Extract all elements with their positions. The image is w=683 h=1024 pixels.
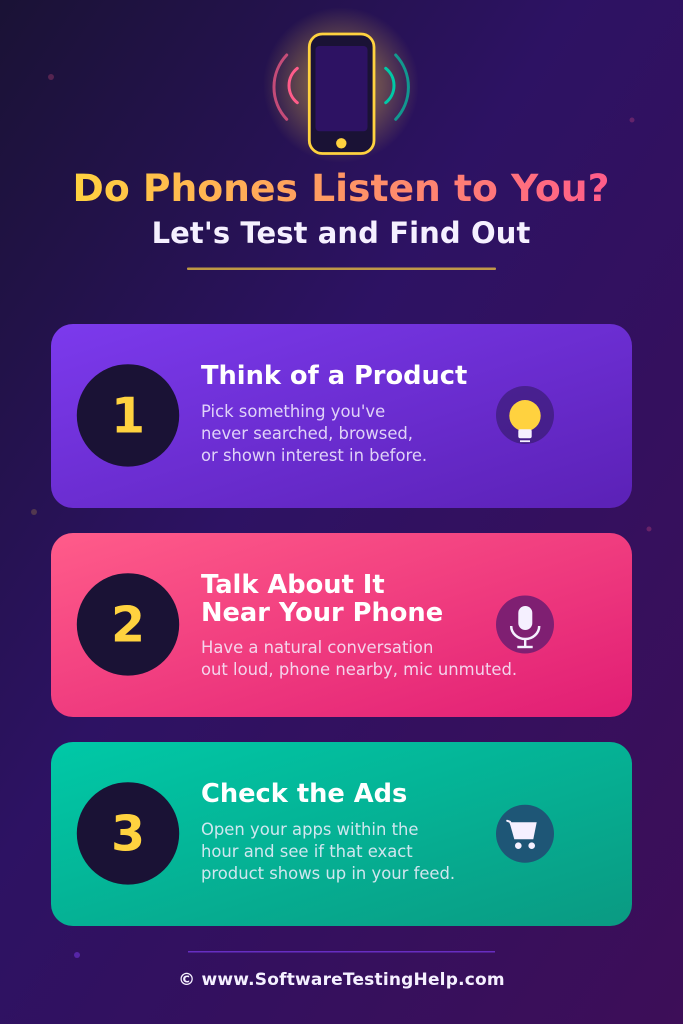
number badge 3 xyxy=(77,782,179,885)
background dots xyxy=(31,74,652,958)
body 2: out loud, phone nearby, mic unmuted. xyxy=(201,660,517,679)
icon: microphone xyxy=(496,596,554,654)
title: Do Phones Listen to You? xyxy=(73,166,609,210)
footer text: © www.SoftwareTestingHelp.com xyxy=(178,970,505,990)
title divider xyxy=(187,268,496,270)
heading 2: Near Your Phone xyxy=(201,598,443,628)
body 3: Open your apps within the xyxy=(201,820,418,839)
phone button xyxy=(336,138,346,148)
footer divider xyxy=(188,951,495,952)
phone body xyxy=(309,34,374,154)
body 2: Have a natural conversation xyxy=(201,638,433,657)
panel: step 3 xyxy=(51,742,632,926)
right inner wave xyxy=(386,68,394,103)
panel: step 2: 2 xyxy=(111,596,145,654)
icon: shopping cart xyxy=(496,805,554,863)
heading 3: Check the Ads xyxy=(201,779,407,809)
left outer wave xyxy=(274,55,287,119)
phone screen xyxy=(316,46,368,131)
panel: step 1 xyxy=(51,324,632,508)
number badge 1 xyxy=(77,364,179,467)
right outer wave xyxy=(396,55,408,119)
icon: light bulb xyxy=(496,386,554,444)
heading 2: Talk About It xyxy=(201,570,385,600)
body 1: never searched, browsed, xyxy=(201,424,413,443)
subtitle: Let's Test and Find Out xyxy=(152,216,530,250)
body 1: or shown interest in before. xyxy=(201,446,427,465)
body 3: hour and see if that exact xyxy=(201,842,413,861)
icon: phone with sound waves xyxy=(263,7,419,163)
left inner wave xyxy=(289,68,297,103)
heading 1: Think of a Product xyxy=(201,361,467,391)
body 3: product shows up in your feed. xyxy=(201,864,455,883)
number badge 2 xyxy=(77,573,179,676)
body 1: Pick something you've xyxy=(201,402,385,421)
panel: step 3: 3 xyxy=(111,806,145,862)
panel: step 1: 1 xyxy=(111,388,145,444)
panel: step 2 xyxy=(51,533,632,717)
